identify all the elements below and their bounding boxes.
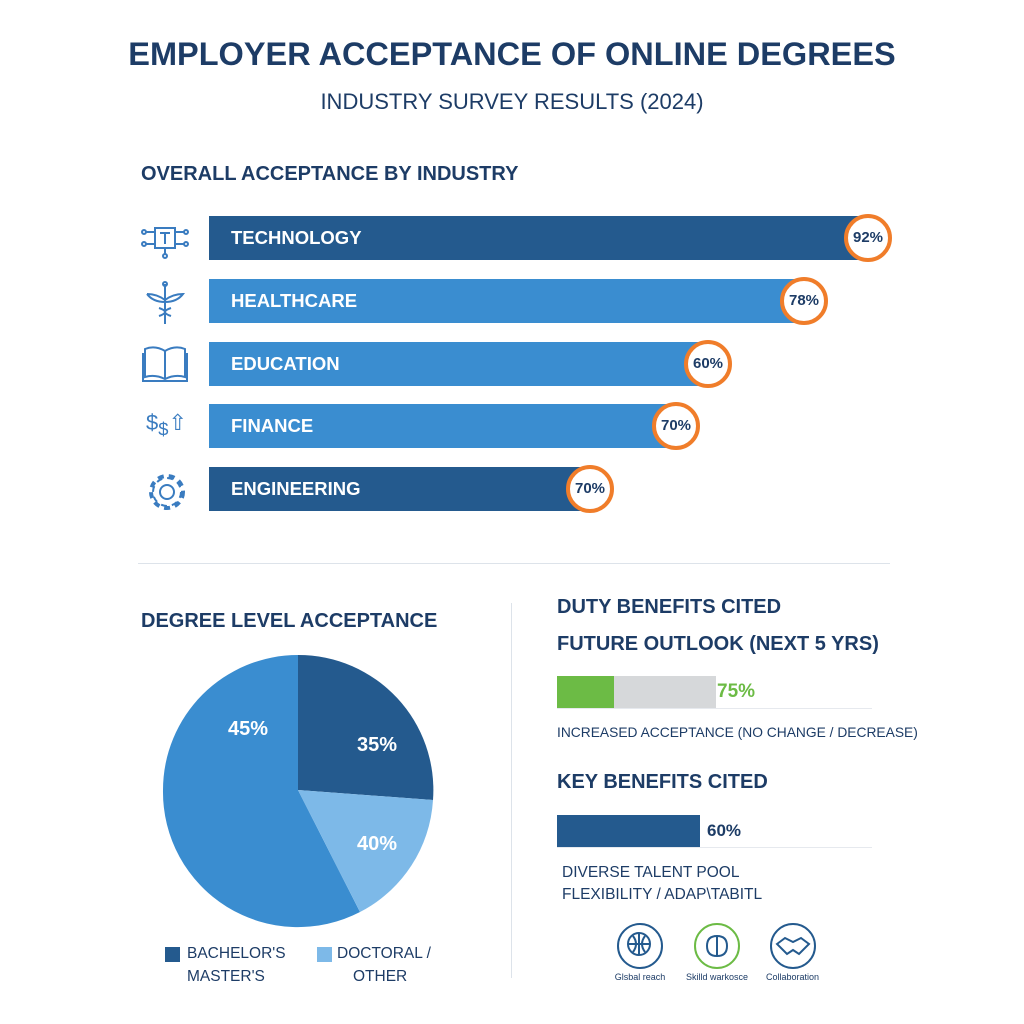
- outlook bar: 75%: [717, 681, 755, 702]
- bar: technology: [209, 216, 870, 260]
- bar: healthcare: [209, 279, 800, 323]
- pie chart: [163, 655, 434, 928]
- legend: OTHER: [353, 968, 407, 985]
- value: 92%: 92%: [853, 229, 883, 246]
- value: 60%: 60%: [693, 355, 723, 372]
- legend: MASTER'S: [187, 968, 265, 985]
- value: 70% finance: 70%: [661, 417, 691, 434]
- heading: degree level: DEGREE LEVEL ACCEPTANCE: [141, 610, 437, 632]
- title: EMPLOYER ACCEPTANCE OF ONLINE DEGREES: [128, 36, 896, 72]
- benefits bar: 60%: [707, 821, 741, 840]
- icon: skilled workforce: Skilld warkosce: [686, 972, 748, 982]
- icon: skilled workforce: [686, 923, 748, 982]
- icon: healthcare: [146, 281, 185, 324]
- legend: [165, 945, 431, 985]
- bar chart: industries: [141, 227, 189, 510]
- pie chart: 35%: [357, 734, 397, 756]
- icon: engineering: [149, 474, 185, 510]
- icon: finance: $$⇧: [146, 410, 187, 439]
- bar: technology: TECHNOLOGY: [231, 227, 362, 248]
- bar: engineering: [209, 467, 590, 511]
- benefits bar: [557, 815, 872, 848]
- bar: finance: FINANCE: [231, 415, 313, 436]
- bar: engineering: ENGINEERING: [231, 478, 361, 499]
- outlook label: INCREASED ACCEPTANCE (NO CHANGE / DECREASE): [557, 725, 918, 740]
- icon row: [615, 923, 819, 982]
- icon: collaboration: Collaboration: [766, 972, 819, 982]
- bar: healthcare: HEALTHCARE: [231, 290, 357, 311]
- value: 60%: [684, 340, 732, 388]
- subtitle: INDUSTRY SURVEY RESULTS (2024): [320, 89, 704, 114]
- value: 78%: [780, 277, 828, 325]
- outlook bar: [557, 676, 872, 709]
- heading: key benefits: KEY BENEFITS CITED: [557, 771, 768, 793]
- legend: DOCTORAL /: [337, 945, 431, 962]
- legend: BACHELOR'S: [187, 945, 286, 962]
- value: 92%: [844, 214, 892, 262]
- bar: education: EDUCATION: [231, 353, 340, 374]
- bar: finance: [209, 404, 676, 448]
- value: 70% engineering: 70%: [575, 480, 605, 497]
- heading: overall acceptance: OVERALL ACCEPTANCE BY INDUSTRY: [141, 163, 518, 185]
- icon: global reach: [615, 923, 665, 982]
- heading: future outlook: FUTURE OUTLOOK (NEXT 5 YRS): [557, 633, 879, 655]
- bar: education: [209, 342, 708, 386]
- pie chart: 45%: [228, 718, 268, 740]
- heading: duty benefits: DUTY BENEFITS CITED: [557, 596, 781, 618]
- icon: technology: [141, 227, 189, 259]
- icon: education: [142, 346, 188, 382]
- icon: global reach: Glsbal reach: [615, 972, 665, 982]
- benefits list: DIVERSE TALENT POOL: [562, 864, 739, 881]
- icon: collaboration: [766, 923, 819, 982]
- value: 70% engineering: [566, 465, 614, 513]
- value: 70% finance: [652, 402, 700, 450]
- value: 78%: 78%: [789, 292, 819, 309]
- pie chart: 40%: [357, 833, 397, 855]
- benefits list: [562, 864, 762, 903]
- benefits list: FLEXIBILITY / ADAP\TABITL: [562, 886, 762, 903]
